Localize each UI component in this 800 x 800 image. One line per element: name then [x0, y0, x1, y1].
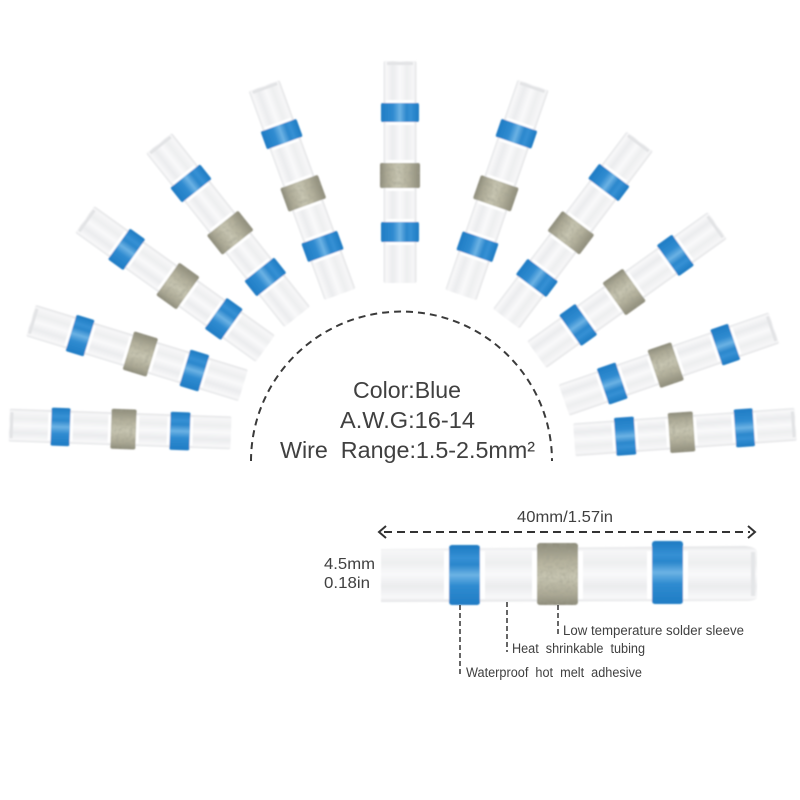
connector 10 — [558, 309, 780, 419]
specification text — [280, 377, 535, 463]
connector 9 — [525, 209, 729, 371]
dashed semicircle — [251, 312, 552, 461]
wire range: Wire Range:1.5-2.5mm² — [280, 437, 535, 463]
large tube — [381, 546, 757, 602]
connector 7 — [442, 79, 552, 301]
connector 8 — [490, 129, 656, 331]
connector 6 — [380, 61, 420, 283]
adhesive label: Waterproof hot melt adhesive — [466, 665, 642, 680]
connector 11 — [573, 404, 797, 460]
connector fan — [8, 61, 797, 460]
large connector diagram — [381, 541, 757, 605]
connector 3 — [73, 203, 277, 365]
part labels — [466, 623, 744, 680]
diameter label — [324, 556, 375, 592]
leader lines — [460, 602, 558, 677]
large solder sleeve — [537, 543, 578, 605]
color: Color:Blue — [353, 377, 461, 403]
tubing label: Heat shrinkable tubing — [512, 641, 645, 656]
connector 2 — [25, 301, 249, 405]
connector 1 — [8, 405, 232, 453]
connector 4 — [143, 131, 313, 329]
length label: 40mm/1.57in — [517, 509, 613, 526]
diameter label: 4.5mm — [324, 556, 375, 573]
large band right — [652, 541, 683, 604]
diameter label: 0.18in — [324, 575, 370, 592]
wire gauge: A.W.G:16-14 — [340, 407, 475, 433]
connector 5 — [245, 79, 359, 301]
length dimension arrow — [379, 526, 755, 538]
large band left — [449, 545, 480, 605]
solder sleeve label: Low temperature solder sleeve — [563, 623, 744, 638]
